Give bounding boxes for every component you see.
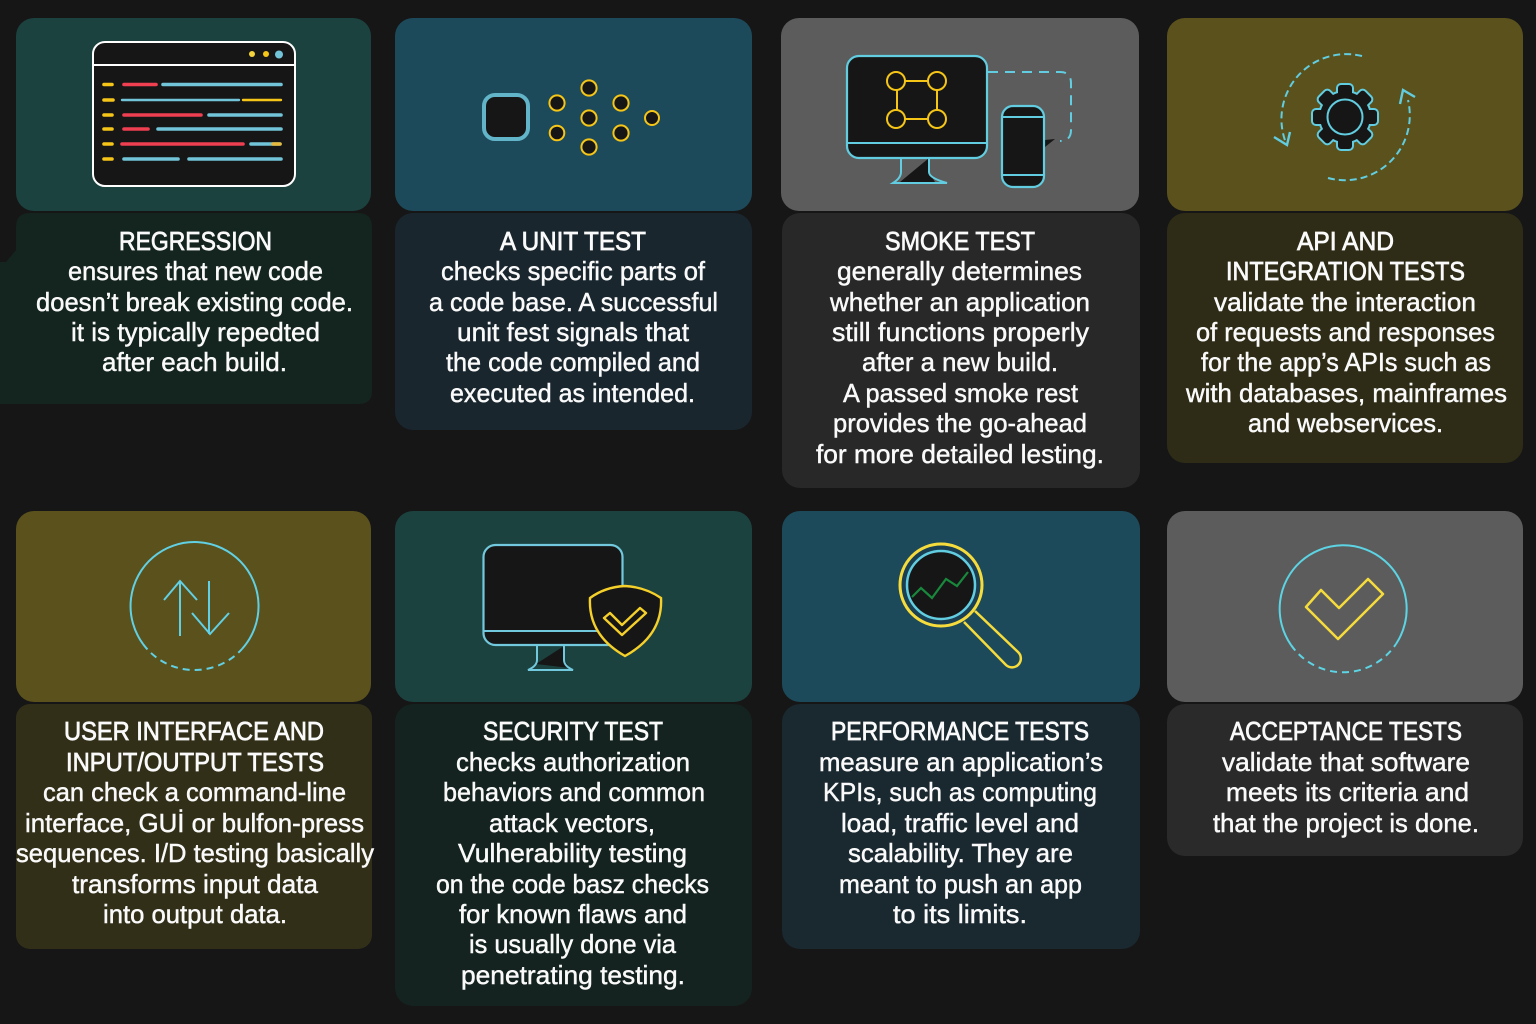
icon: code window <box>93 42 295 186</box>
text: performance tests: load, traffic level and <box>841 808 1079 838</box>
panel: security test <box>395 511 752 1006</box>
text: api tests: and webservices. <box>1248 408 1443 438</box>
text: smoke test: SMOKE TEST <box>885 226 1035 256</box>
text: api tests: validate the interaction <box>1214 287 1476 317</box>
text: api tests: with databases, mainframes <box>1185 378 1507 408</box>
text: unit test: executed as intended. <box>450 378 695 408</box>
text: security test <box>436 716 709 990</box>
text: performance tests: measure an application’s <box>819 747 1103 777</box>
text: security test: penetrating testing. <box>461 960 685 990</box>
text: security test: behaviors and common <box>443 777 705 807</box>
text: ui tests: can check a command-line <box>43 777 346 807</box>
icon: check mark in circle <box>1280 545 1407 672</box>
text: acceptance tests: ACCEPTANCE TESTS <box>1230 716 1462 746</box>
text: api tests: API AND <box>1297 226 1394 256</box>
text tile: unit test <box>395 213 752 430</box>
text: performance tests <box>819 716 1103 929</box>
text: performance tests: KPIs, such as computing <box>823 777 1097 807</box>
text: smoke test <box>816 226 1104 469</box>
text: ui tests: into output data. <box>103 899 287 929</box>
text: acceptance tests <box>1213 716 1479 838</box>
icon: monitor with shield <box>483 545 661 670</box>
text: unit test: checks specific parts of <box>441 256 706 286</box>
image tile: performance tests <box>782 511 1140 702</box>
text: regression: doesn’t break existing code. <box>36 287 353 317</box>
text: security test: SECURITY TEST <box>483 716 663 746</box>
text: performance tests: to its limits. <box>893 899 1027 929</box>
text: api tests: of requests and responses <box>1196 317 1495 347</box>
text: api tests: INTEGRATION TESTS <box>1226 256 1465 286</box>
panel: smoke test <box>781 18 1140 488</box>
image tile: unit test <box>395 18 752 211</box>
image tile: smoke test <box>781 18 1139 211</box>
text tile: regression <box>0 213 372 404</box>
icon: unit blocks <box>484 80 659 155</box>
text: ui tests: transforms input data <box>72 869 319 899</box>
text: regression: after each build. <box>102 347 287 377</box>
text tile: security test <box>395 704 752 1006</box>
image tile: api tests <box>1167 18 1523 211</box>
text: regression <box>36 226 353 377</box>
text: regression: it is typically repedted <box>71 317 320 347</box>
text tile: api tests <box>1167 213 1523 463</box>
text: unit test: the code compiled and <box>446 347 700 377</box>
image tile: acceptance tests <box>1167 511 1523 702</box>
text: unit test: A UNIT TEST <box>500 226 646 256</box>
text: unit test: unit fest signals that <box>457 317 690 347</box>
text: api tests: for the app’s APIs such as <box>1201 347 1491 377</box>
text: smoke test: generally determines <box>837 256 1082 286</box>
icon: up and down arrows in circle <box>131 542 259 670</box>
panel: regression <box>0 18 372 404</box>
text: smoke test: A passed smoke rest <box>843 378 1079 408</box>
panel: unit test <box>395 18 752 430</box>
text: api tests <box>1185 226 1507 438</box>
text: ui tests: USER INTERFACE AND <box>64 716 324 746</box>
text: smoke test: for more detailed lesting. <box>816 439 1104 469</box>
text tile: smoke test <box>782 213 1140 488</box>
text: performance tests: scalability. They are <box>848 838 1073 868</box>
icon: magnifier with chart <box>900 544 1021 667</box>
text: security test: on the code basz checks <box>436 869 709 899</box>
panel: user interface and io tests <box>16 511 374 949</box>
text: unit test <box>429 226 718 408</box>
text tile: performance tests <box>782 704 1140 949</box>
icon: gear with cycle arrows <box>1274 54 1415 180</box>
text: regression: ensures that new code <box>68 256 323 286</box>
text tile: acceptance tests <box>1167 704 1523 856</box>
panel: performance tests <box>782 511 1140 949</box>
panel: acceptance tests <box>1167 511 1523 856</box>
text: unit test: a code base. A successful <box>429 287 718 317</box>
text: security test: checks authorization <box>456 747 690 777</box>
text: ui tests: INPUT/OUTPUT TESTS <box>66 747 324 777</box>
text: security test: attack vectors, <box>489 808 655 838</box>
text: security test: is usually done via <box>469 929 677 959</box>
text: smoke test: still functions properly <box>832 317 1089 347</box>
text: smoke test: whether an application <box>829 287 1090 317</box>
image tile: ui tests <box>16 511 371 702</box>
text: performance tests: PERFORMANCE TESTS <box>831 716 1089 746</box>
text: smoke test: after a new build. <box>862 347 1058 377</box>
panel: api and integration tests <box>1167 18 1523 463</box>
text: ui tests: sequences. I/D testing basically <box>16 838 374 868</box>
text: acceptance tests: that the project is done. <box>1213 808 1479 838</box>
text: acceptance tests: meets its criteria and <box>1226 777 1469 807</box>
text: security test: Vulherability testing <box>458 838 687 868</box>
text: acceptance tests: validate that software <box>1222 747 1470 777</box>
text: ui tests: interface, GUİ or bulfon-press <box>25 808 364 838</box>
text: performance tests: meant to push an app <box>839 869 1082 899</box>
image tile: security test <box>395 511 752 702</box>
text: ui tests <box>16 716 374 929</box>
text: smoke test: provides the go-ahead <box>833 408 1087 438</box>
image tile: regression <box>16 18 371 211</box>
text: regression: REGRESSION <box>119 226 272 256</box>
icon: monitor and phone <box>847 56 1071 187</box>
text: security test: for known flaws and <box>459 899 687 929</box>
text tile: ui tests <box>16 704 372 949</box>
